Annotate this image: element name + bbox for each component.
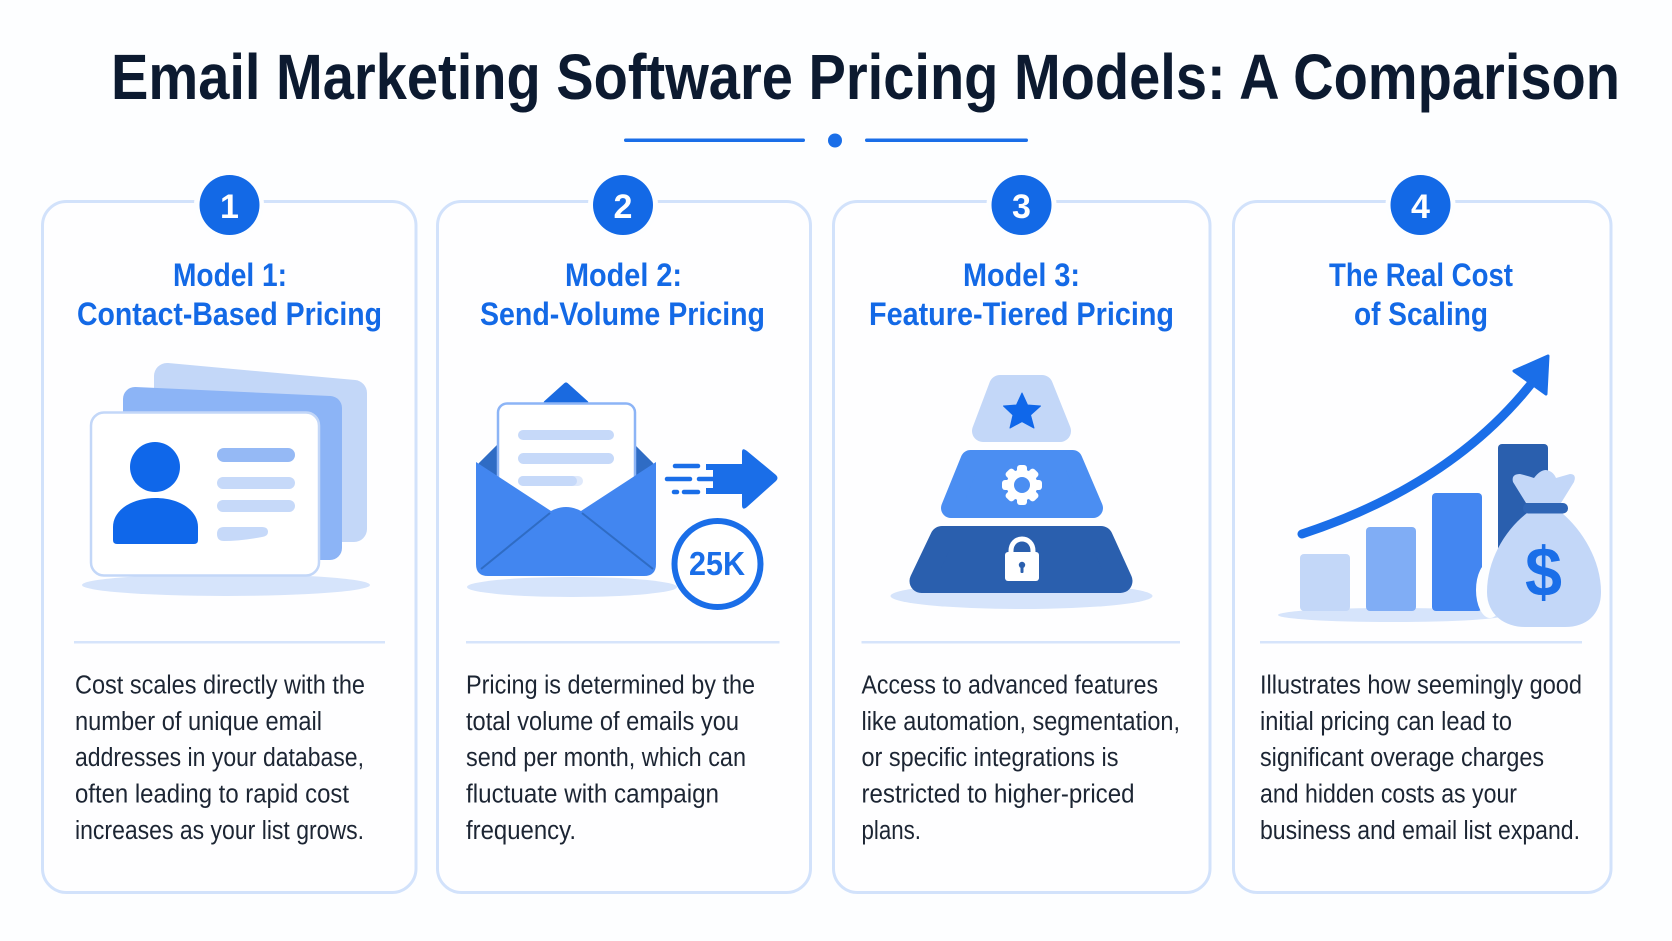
description: like automation, segmentation,: [862, 708, 1180, 736]
divider: [466, 641, 780, 644]
description: [75, 672, 365, 845]
icon: growth chart with money bag: [1278, 356, 1601, 627]
title divider: [624, 134, 1028, 148]
heading: Model 3:: [963, 257, 1080, 293]
panel: model 1 contact-based pricing: [42, 170, 416, 892]
number badge 1: [194, 170, 264, 240]
heading: [1329, 257, 1513, 332]
panel: the real cost of scaling: [1234, 170, 1611, 892]
panel: model 2 send-volume pricing: [438, 170, 810, 892]
heading: of Scaling: [1354, 296, 1488, 332]
description: Illustrates how seemingly good: [1260, 672, 1582, 700]
number badge 2: 2: [614, 188, 632, 226]
heading: Feature-Tiered Pricing: [869, 296, 1174, 332]
number badge 1: 1: [220, 188, 239, 226]
description: fluctuate with campaign: [466, 780, 719, 808]
description: increases as your list grows.: [75, 817, 364, 845]
description: and hidden costs as your: [1260, 780, 1517, 808]
description: Pricing is determined by the: [466, 672, 755, 700]
number badge 2: [588, 170, 658, 240]
description: significant overage charges: [1260, 744, 1544, 772]
divider: [1260, 641, 1582, 644]
heading: [480, 257, 765, 332]
description: initial pricing can lead to: [1260, 708, 1512, 736]
description: often leading to rapid cost: [75, 780, 349, 808]
heading: Contact-Based Pricing: [77, 296, 382, 332]
description: or specific integrations is: [862, 744, 1118, 772]
number badge 3: [986, 170, 1056, 240]
heading: Model 1:: [173, 257, 287, 293]
description: Cost scales directly with the: [75, 672, 365, 700]
description: number of unique email: [75, 708, 322, 736]
heading: Send-Volume Pricing: [480, 296, 765, 332]
icon: open envelope with send arrow and 25K badge: [467, 385, 778, 607]
speed arrow: [667, 449, 778, 509]
divider: [74, 641, 385, 644]
description: addresses in your database,: [75, 744, 364, 772]
heading: [869, 257, 1174, 332]
description: total volume of emails you: [466, 708, 739, 736]
heading: Model 2:: [565, 257, 682, 293]
number badge 4: 4: [1411, 188, 1430, 226]
description: business and email list expand.: [1260, 817, 1580, 845]
number badge 3: 3: [1012, 188, 1031, 226]
icon: open envelope with send arrow and 25K badge: 25K: [689, 545, 745, 582]
icon: growth chart with money bag: $: [1525, 533, 1562, 611]
icon: contact cards: [82, 376, 370, 596]
description: plans.: [862, 817, 921, 845]
description: [862, 672, 1180, 845]
description: restricted to higher-priced: [862, 780, 1134, 808]
heading: [77, 257, 382, 332]
icon: feature tier pyramid: [890, 386, 1152, 609]
description: Access to advanced features: [862, 672, 1158, 700]
divider: [862, 641, 1180, 644]
number badge 4: [1386, 170, 1456, 240]
heading: The Real Cost: [1329, 257, 1513, 293]
description: [1260, 672, 1582, 845]
description: [466, 672, 755, 845]
panel: model 3 feature-tiered pricing: [834, 170, 1210, 892]
description: send per month, which can: [466, 744, 746, 772]
description: frequency.: [466, 817, 576, 845]
